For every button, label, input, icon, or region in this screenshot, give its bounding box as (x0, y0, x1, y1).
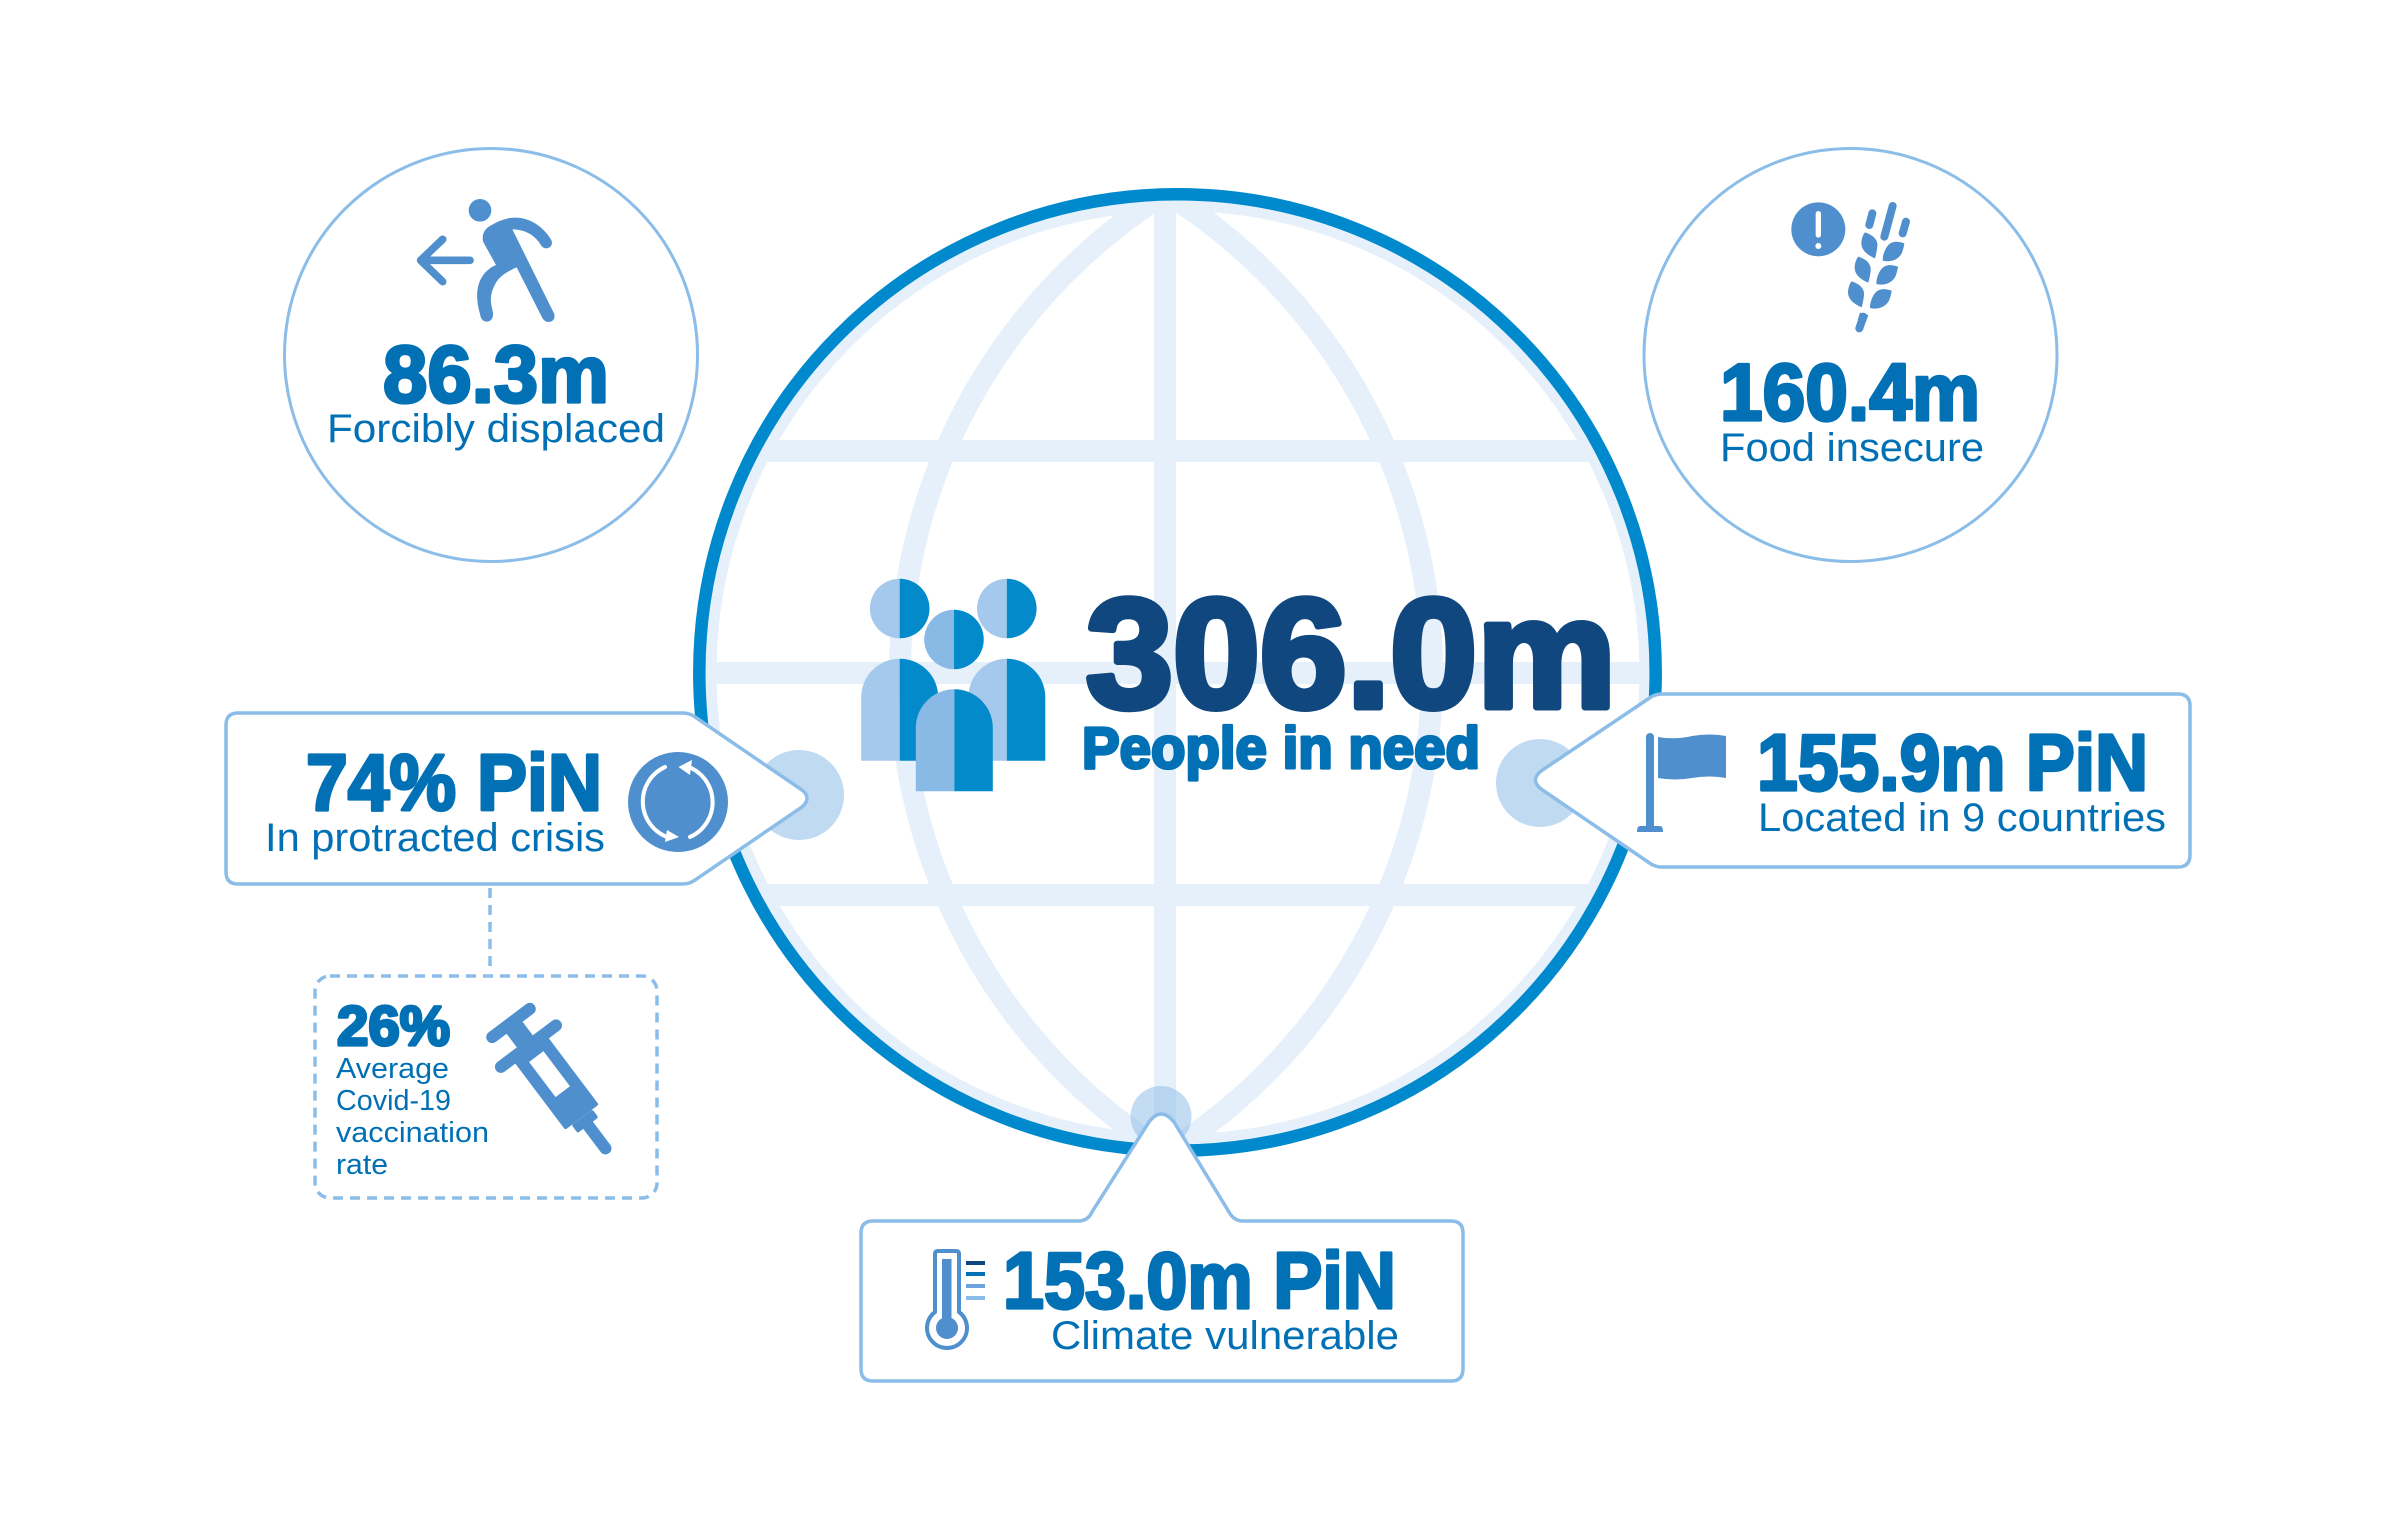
label: food insecure: Food insecure (1720, 426, 1984, 470)
panel: forcibly displaced (284, 148, 698, 562)
label: climate vulnerable: Climate vulnerable (1051, 1314, 1399, 1358)
icon: alert and wheat (1791, 202, 1906, 328)
value: 160.4m: 160.4m (1720, 348, 1980, 438)
label: average covid-19 vaccination rate: Average (336, 1053, 449, 1085)
callout: nine countries (1536, 694, 2190, 867)
callout: protracted crisis (226, 713, 807, 884)
icon: syringe (483, 1002, 633, 1169)
value: 74% PiN: 74% PiN (306, 738, 602, 827)
value: 155.9m PiN: 155.9m PiN (1757, 718, 2148, 807)
icon: thermometer (927, 1251, 985, 1348)
connector: dashed line to vaccination box (488, 888, 492, 972)
label: forcibly displaced: Forcibly displaced (327, 407, 665, 451)
headline: people in need (861, 567, 1616, 791)
value: 86.3m: 86.3m (383, 330, 609, 420)
label: located in 9 countries: Located in 9 countries (1758, 796, 2166, 840)
value: 306.0m: 306.0m (1086, 567, 1616, 740)
infographic canvas (224, 147, 2192, 1383)
label: people in need: People in need (1082, 716, 1480, 781)
callout: climate vulnerable (861, 1114, 1463, 1381)
label: average covid-19 vaccination rate: Covid-19 (336, 1085, 451, 1117)
marker: climate vulnerable (1130, 1086, 1192, 1147)
label: in protracted crisis: In protracted crisis (265, 816, 605, 860)
value: 153.0m PiN: 153.0m PiN (1003, 1236, 1396, 1325)
globe (690, 190, 1670, 1160)
value: 26%: 26% (337, 994, 450, 1057)
icon: person fleeing with arrow (421, 199, 555, 322)
label: average covid-19 vaccination rate: rate (336, 1149, 388, 1181)
marker: nine countries (1496, 739, 1584, 827)
icon: cycle arrows (628, 752, 728, 852)
label: average covid-19 vaccination rate: vaccination (336, 1117, 489, 1149)
label: average covid-19 vaccination rate (336, 1053, 489, 1181)
marker: protracted crisis (754, 750, 844, 840)
panel: food insecure (1644, 148, 2057, 562)
icon: group of people (861, 579, 1045, 791)
icon: flag (1637, 733, 1726, 832)
panel: vaccination rate (315, 976, 657, 1198)
